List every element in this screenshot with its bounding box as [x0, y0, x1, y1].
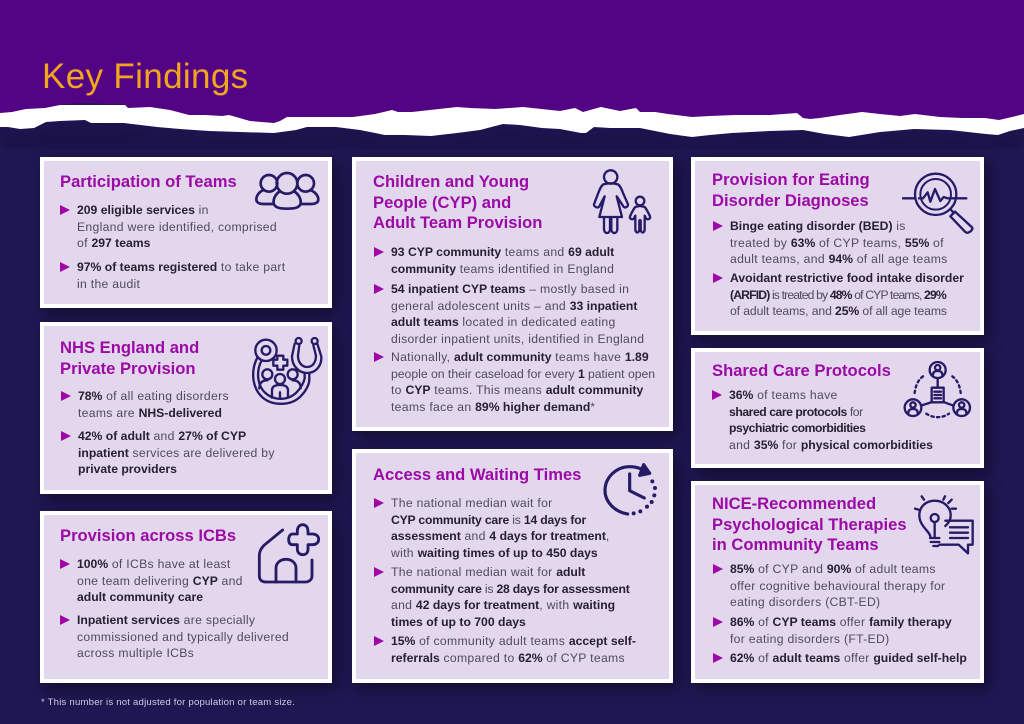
bullet: inpatient services	[60, 613, 289, 660]
bullet: NHS-delivered: 78% of all eating disorders	[78, 389, 229, 403]
bullet: inpatient teams: general adolescent units – and 33 inpatient	[391, 298, 637, 312]
bullet: community teams: 93 CYP community teams and 69 adult	[391, 245, 614, 259]
heading: NICE-Recommended	[712, 494, 876, 513]
bullet: guided self-help: 62% of adult teams offer guided self-help	[730, 651, 967, 665]
bullet: adult community wait	[374, 565, 630, 628]
bullet: CBT-ED: 85% of CYP and 90% of adult teams	[730, 562, 936, 576]
bullet: inpatient teams: adult teams located in dedicated eating	[391, 315, 616, 329]
bullet: ICB coverage	[60, 557, 243, 604]
bullet: shared care stats: psychiatric comorbidities	[729, 421, 865, 435]
bullet: ICB coverage: adult community care	[77, 590, 203, 604]
bullet: adult community demand: to CYP teams. This means adult community	[391, 383, 643, 397]
bullet: private providers: 42% of adult and 27% of CYP	[78, 429, 246, 443]
bullet: adult community demand: people on their caseload for every 1 patient open	[391, 366, 655, 380]
bullet: shared care stats: shared care protocols for	[729, 404, 863, 418]
heading: Adult Team Provision	[373, 213, 542, 232]
icon: house with cross	[258, 523, 320, 584]
bullet: CYP community wait: with waiting times of up to 450 days	[391, 546, 598, 560]
heading: in Community Teams	[712, 535, 879, 554]
panel: participation of teams	[40, 157, 332, 308]
bullet: ARFID: Avoidant restrictive food intake disorder	[730, 271, 964, 285]
heading: NHS England and	[60, 338, 199, 357]
panel: NHS England and private provision	[40, 322, 332, 494]
bullet: ARFID: (ARFID) is treated by 48% of CYP teams, 29%	[730, 288, 946, 302]
heading: People (CYP) and	[373, 192, 511, 212]
heading: Provision for Eating	[712, 170, 870, 189]
heading: Participation of Teams	[60, 172, 237, 191]
bullet: ICB coverage: 100% of ICBs have at least	[77, 557, 231, 571]
bullet: CBT-ED: eating disorders (CBT-ED)	[730, 595, 880, 609]
bullet: CYP community wait	[374, 496, 610, 560]
bullet: inpatient services: across multiple ICBs	[77, 646, 194, 660]
heading: Private Provision	[60, 358, 196, 378]
bullet: CYP community wait: assessment and 4 days for treatment,	[391, 529, 610, 543]
heading: Psychological Therapies	[712, 514, 907, 534]
bullet: adult community wait: community care is 28 days for assessment	[391, 582, 630, 596]
bullet: CYP community wait: The national median wait for	[391, 496, 553, 510]
bullet: NHS-delivered: teams are NHS-delivered	[78, 406, 222, 420]
bullet: adult community demand	[374, 350, 655, 414]
heading	[373, 172, 542, 232]
heading: Access and Waiting Times	[373, 465, 581, 484]
heading: Provision across ICBs	[60, 526, 236, 545]
bullet: teams registered	[60, 260, 286, 290]
bullet: CYP community wait: CYP community care is 14 days for	[391, 512, 586, 526]
bullet: adult community demand: Nationally, adult community teams have 1.89	[391, 350, 649, 364]
heading	[712, 170, 870, 210]
bullet: family therapy: for eating disorders (FT-ED)	[730, 632, 889, 646]
panel: CYP and adult team provision	[352, 157, 673, 431]
bullet: ARFID	[713, 271, 964, 318]
bullet: self-referrals: referrals compared to 62% of CYP teams	[391, 650, 625, 664]
heading: Shared Care Protocols	[712, 361, 891, 380]
bullet: private providers: private providers	[78, 462, 177, 476]
bullet: adult community wait: and 42 days for treatment, with waiting	[391, 598, 615, 612]
bullet: CBT-ED: offer cognitive behavioural therapy for	[730, 578, 945, 592]
bullet: eligible services: England were identified, comprised	[77, 220, 277, 234]
bullet: adult community wait: The national median wait for adult	[391, 565, 585, 579]
icon: shared care network	[904, 361, 972, 418]
bullet: binge eating disorder: adult teams, and 94% of all age teams	[730, 252, 948, 266]
bullet: inpatient teams: 54 inpatient CYP teams – mostly based in	[391, 282, 629, 296]
bullet: eligible services: 209 eligible services in	[77, 203, 209, 217]
bullet: private providers: inpatient services are delivered by	[78, 446, 275, 460]
heading: Disorder Diagnoses	[712, 190, 869, 210]
bullet: adult community wait: times of up to 700 days	[391, 614, 526, 628]
bullet: shared care stats	[712, 388, 933, 452]
bullet: binge eating disorder: treated by 63% of CYP teams, 55% of	[730, 236, 944, 250]
icon: group of people	[255, 172, 320, 210]
footnote: * This number is not adjusted for population or team size.	[41, 697, 295, 708]
bullet: ICB coverage: one team delivering CYP and	[77, 574, 243, 588]
bullet: shared care stats: 36% of teams have	[729, 388, 838, 402]
bullet: inpatient services: Inpatient services are specially	[77, 613, 255, 627]
heading	[712, 494, 907, 554]
icon: stethoscope and people	[252, 336, 322, 405]
bullet: inpatient teams: disorder inpatient units, identified in England	[391, 332, 644, 346]
bullet: family therapy	[713, 615, 952, 646]
heading	[60, 338, 199, 378]
bullet: adult community demand: teams face an 89% higher demand*	[391, 400, 595, 414]
bullet: self-referrals	[374, 634, 636, 664]
bullet: self-referrals: 15% of community adult teams accept self-	[391, 634, 636, 648]
icon: adult and child	[592, 169, 652, 234]
bullet: community teams	[374, 245, 614, 276]
heading: Children and Young	[373, 172, 529, 191]
icon: clock	[603, 463, 657, 516]
title: Key Findings	[42, 57, 249, 96]
bullet: ARFID: of adult teams, and 25% of all age teams	[730, 304, 947, 318]
panel: access and waiting times	[352, 449, 673, 683]
header band	[0, 0, 1024, 146]
bullet: teams registered: 97% of teams registered to take part	[77, 260, 285, 274]
icon: lightbulb with speech bubble	[914, 495, 974, 554]
panel: NICE-recommended psychological therapies	[691, 481, 984, 683]
bullet: inpatient services: commissioned and typically delivered	[77, 630, 289, 644]
icon: magnifier with pulse	[902, 172, 974, 234]
panel: provision for eating disorder diagnoses	[691, 157, 984, 335]
bullet: teams registered: in the audit	[77, 276, 140, 290]
panel: provision across ICBs	[40, 511, 332, 683]
bullet: community teams: community teams identified in England	[391, 262, 614, 276]
bullet: family therapy: 86% of CYP teams offer family therapy	[730, 615, 952, 629]
bullet: eligible services: of 297 teams	[77, 236, 150, 250]
bullet: private providers	[61, 429, 275, 476]
bullet: NHS-delivered	[61, 389, 229, 420]
bullet: shared care stats: and 35% for physical comorbidities	[729, 438, 933, 452]
panel: shared care protocols	[691, 348, 984, 468]
bullet: binge eating disorder	[713, 219, 948, 266]
bullet: eligible services	[60, 203, 277, 250]
bullet: inpatient teams	[374, 282, 644, 346]
bullet: binge eating disorder: Binge eating disorder (BED) is	[730, 219, 906, 233]
bullet: CBT-ED	[713, 562, 945, 609]
